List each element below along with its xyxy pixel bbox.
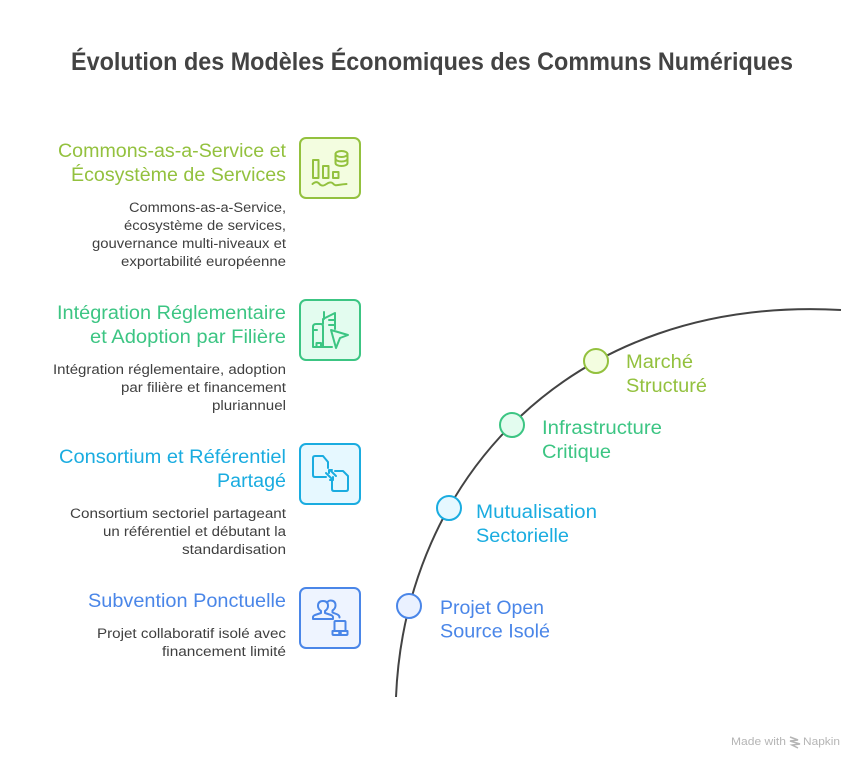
marker: marché structuré: Marché [626, 351, 693, 373]
marker: infrastructure critique: Critique [542, 441, 611, 463]
description: commons-as-a-service [92, 200, 286, 270]
heading: consortium: Consortium et Référentiel [59, 446, 286, 468]
marker: mutualisation sectorielle [437, 496, 597, 547]
heading: commons-as-a-service: Commons-as-a-Service et [58, 140, 287, 162]
description: consortium: Consortium sectoriel partageant [70, 506, 286, 522]
heading: intégration réglementaire: Intégration Réglementaire [57, 302, 286, 324]
description: commons-as-a-service: exportabilité européenne [121, 254, 286, 270]
watermark [731, 736, 840, 748]
icon: exchanged documents [300, 444, 360, 504]
description: commons-as-a-service: Commons-as-a-Service, [129, 200, 286, 216]
heading: commons-as-a-service [58, 140, 287, 186]
watermark: Made with [731, 736, 786, 748]
description: intégration réglementaire: par filière et financement [121, 380, 286, 396]
description: consortium: un référentiel et débutant la [103, 524, 286, 540]
watermark: Napkin [803, 736, 840, 748]
description: intégration réglementaire [53, 362, 286, 414]
heading: intégration réglementaire [57, 302, 286, 348]
heading: intégration réglementaire: et Adoption par Filière [90, 326, 286, 348]
heading: subvention ponctuelle: Subvention Ponctuelle [88, 590, 286, 612]
icon: bars and database [300, 138, 360, 198]
marker: infrastructure critique [500, 413, 662, 463]
marker: projet open source isolé [397, 594, 550, 642]
curve timeline [396, 309, 841, 697]
heading: commons-as-a-service: Écosystème de Services [71, 163, 286, 186]
heading: consortium [59, 446, 286, 492]
panel: consortium [59, 444, 360, 558]
description: commons-as-a-service: gouvernance multi-niveaux et [92, 236, 286, 252]
marker: mutualisation sectorielle: Sectorielle [476, 525, 569, 547]
marker: infrastructure critique: Infrastructure [542, 417, 662, 439]
description: consortium [70, 506, 286, 558]
marker: marché structuré: Structuré [626, 375, 707, 397]
icon: people and laptop [300, 588, 360, 648]
description: subvention ponctuelle: financement limité [162, 644, 286, 660]
marker: marché structuré [584, 349, 707, 397]
marker: projet open source isolé: Source Isolé [440, 620, 550, 642]
panel: intégration réglementaire [53, 300, 360, 414]
title: Évolution des Modèles Économiques des Communs Numériques [71, 47, 793, 76]
panel: commons-as-a-service [58, 138, 360, 270]
icon: buildings and cursor [300, 300, 360, 360]
description: intégration réglementaire: pluriannuel [212, 398, 286, 414]
description: consortium: standardisation [182, 542, 286, 558]
panel: subvention ponctuelle [88, 588, 360, 660]
description: subvention ponctuelle: Projet collaboratif isolé avec [97, 626, 286, 642]
marker: mutualisation sectorielle: Mutualisation [476, 501, 597, 523]
heading: consortium: Partagé [217, 470, 286, 492]
description: subvention ponctuelle [97, 626, 286, 660]
marker: projet open source isolé: Projet Open [440, 597, 544, 619]
description: intégration réglementaire: Intégration réglementaire, adoption [53, 362, 286, 378]
description: commons-as-a-service: écosystème de services, [124, 218, 286, 234]
